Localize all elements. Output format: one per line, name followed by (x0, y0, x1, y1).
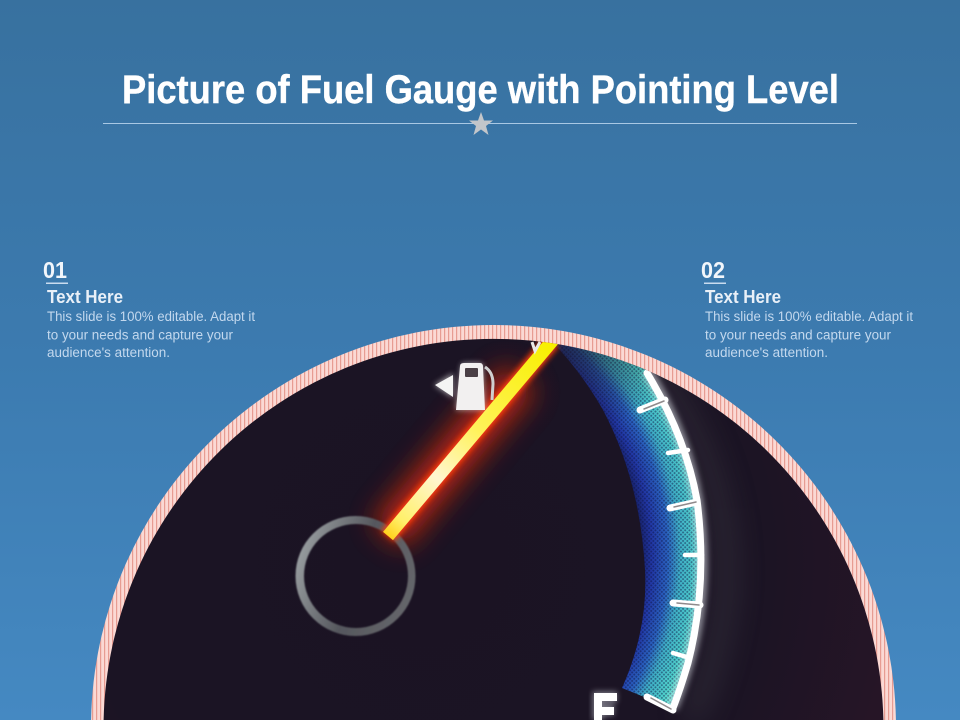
callout 02: to your needs and capture your (705, 328, 891, 342)
callout 02: 02 (701, 257, 725, 283)
title: Picture of Fuel Gauge with Pointing Level (122, 68, 839, 112)
callout 01: Text Here (47, 287, 123, 307)
callout 02: This slide is 100% editable. Adapt it (705, 309, 913, 324)
callout 02: audience's attention. (705, 345, 828, 360)
fuel F letter (598, 697, 617, 720)
callout 01: This slide is 100% editable. Adapt it (47, 309, 255, 324)
gauge photo (100, 335, 890, 720)
callout 01: to your needs and capture your (47, 328, 233, 342)
callout 02 (701, 257, 913, 360)
callout 01: 01 (43, 257, 67, 283)
gauge dial face (100, 335, 890, 720)
needle halo (388, 341, 552, 536)
callout 01: audience's attention. (47, 345, 170, 360)
blue fuel band (552, 342, 702, 708)
callout 01 (43, 257, 255, 360)
haze right of scale (650, 365, 726, 720)
needle (388, 340, 553, 536)
callout 02: Text Here (705, 287, 781, 307)
icon: fuel pump with arrow (434, 363, 493, 410)
scale glow (647, 371, 702, 708)
striped pink ring around gauge (91, 325, 896, 720)
title divider with star (103, 112, 857, 135)
fuel scale arc and ticks (640, 373, 702, 710)
needle glow (388, 378, 520, 535)
small tick at needle top (532, 342, 540, 351)
gauge hub ring (296, 516, 416, 636)
fuel F letter glow (598, 697, 617, 720)
